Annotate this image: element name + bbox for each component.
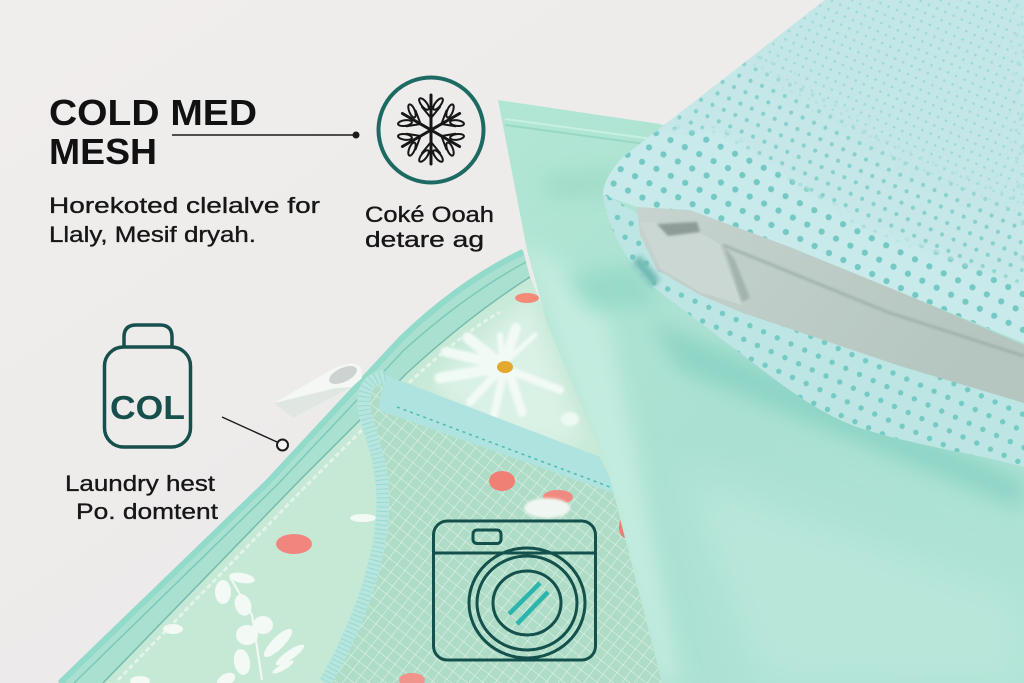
icon: detergent bottle: COL	[110, 389, 185, 426]
snowflake caption	[365, 202, 494, 252]
laundry caption: Laundry hest	[65, 471, 215, 496]
title	[49, 92, 257, 172]
white leaves	[130, 514, 376, 683]
pocket side binding	[325, 376, 385, 683]
description text	[49, 193, 320, 247]
title: MESH	[49, 131, 157, 172]
daisy flower	[440, 328, 579, 426]
callout line to zipper	[222, 417, 288, 450]
snowflake caption: detare ag	[365, 227, 484, 252]
mesh pocket	[325, 375, 662, 683]
laundry caption: Po. domtent	[76, 499, 218, 524]
description text: Horekoted clelalve for	[49, 193, 320, 218]
callout line to snowflake	[172, 132, 360, 138]
pink dots	[276, 293, 539, 554]
snowflake caption: Coké Ooah	[365, 202, 494, 227]
laundry caption	[65, 471, 218, 524]
title: COLD MED	[49, 92, 257, 133]
zipper pull	[274, 362, 362, 418]
icon: detergent bottle	[104, 325, 190, 447]
pouch with floral fabric	[103, 277, 662, 683]
pocket top binding	[378, 375, 618, 495]
folded perforated mesh	[590, 0, 1024, 467]
icon: washing machine	[434, 521, 596, 660]
icon: snowflake in circle	[378, 78, 484, 182]
pocket dots	[399, 471, 631, 683]
description text: Llaly, Mesif dryah.	[49, 222, 256, 247]
zipper band	[58, 250, 530, 683]
mint fabric sheet	[490, 90, 1024, 683]
